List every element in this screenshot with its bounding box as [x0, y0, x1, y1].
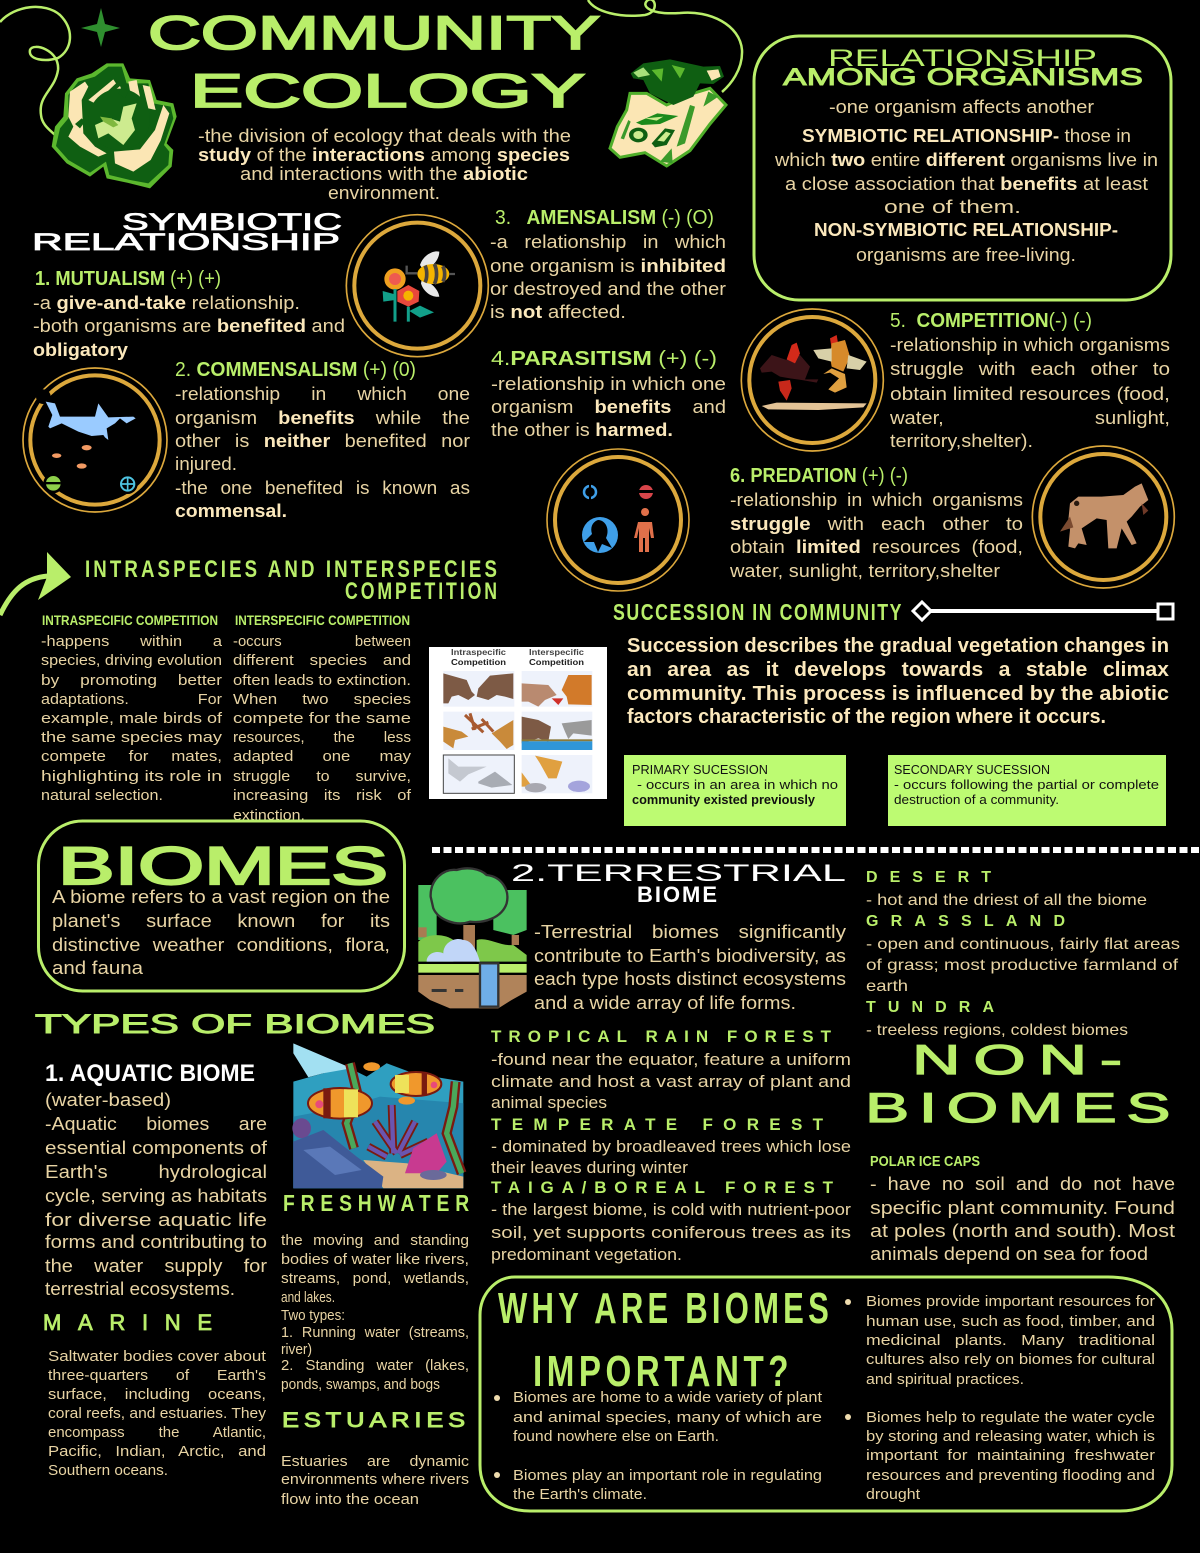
text: amensalism: or destroyed and the other — [490, 279, 726, 299]
text: polar ice caps: POLAR ICE CAPS — [870, 1153, 980, 1170]
text: predation: obtain limited resources (food, — [730, 537, 1023, 557]
text: tropical, temperate, taiga forests: -found near the equator, feature a uniform — [491, 1050, 851, 1069]
text: marine: Pacific, Indian, Arctic, and — [48, 1443, 266, 1460]
text: terrestrial biome description — [534, 922, 846, 1013]
text: estuaries: Estuaries are dynamic — [281, 1453, 470, 1470]
text: tropical, temperate, taiga forests: climate and host a vast array of plant and — [491, 1072, 851, 1091]
text: competition: 5. COMPETITION(-) (-) — [890, 310, 1092, 332]
title — [148, 6, 600, 117]
text: marine — [43, 1310, 267, 1479]
icon: forest landscape with waterfall — [418, 868, 527, 1008]
panel: why are biomes important — [480, 1277, 1172, 1511]
text: commensalism: other is neither benefited nor — [175, 431, 470, 451]
intro text: and interactions with the abiotic — [240, 164, 528, 184]
text: freshwater: river) — [281, 1341, 312, 1358]
text: predation: struggle with each other to — [730, 514, 1023, 534]
text: freshwater: 2. Standing water (lakes, — [281, 1357, 469, 1374]
text: mutualism: -a give-and-take relationship. — [33, 293, 300, 313]
text: aquatic biome: -Aquatic biomes are — [45, 1114, 267, 1134]
text: intraspecific competition: natural selection. — [41, 787, 163, 804]
text: terrestrial biome description: each type hosts distinct ecosystems — [534, 969, 846, 989]
text: commensalism: organism benefits while the — [175, 408, 470, 428]
text: interspecific competition: extinction. — [233, 807, 305, 824]
bullet list: right: Biomes provide important resources for — [866, 1293, 1155, 1310]
text: aquatic biome: (water-based) — [45, 1090, 171, 1110]
text: tropical, temperate, taiga forests: soil, yet supports coniferous trees as its — [491, 1223, 851, 1242]
image: intraspecific vs interspecific competition animals: Competition — [529, 657, 584, 667]
text: estuaries: ESTUARIES — [282, 1409, 470, 1432]
text: desert, grassland, tundra: - treeless regions, coldest biomes — [866, 1022, 1128, 1039]
panel text: a close association that benefits at least — [785, 174, 1148, 194]
text: interspecific competition: struggle to survive, — [233, 768, 411, 785]
arrow — [0, 552, 71, 615]
callout: primary succession: PRIMARY SUCESSION — [632, 762, 768, 777]
text: freshwater: 1. Running water (streams, — [281, 1324, 469, 1341]
bullet list: right: human use, such as food, timber, and — [866, 1313, 1155, 1330]
text: estuaries: environments where rivers — [281, 1471, 469, 1488]
heading: non-biomes: BIOMES — [865, 1084, 1180, 1131]
icon: bee and flowers in gold ring — [346, 215, 488, 357]
text: desert, grassland, tundra — [866, 869, 1180, 1039]
text: terrestrial biome description: contribute to Earth's biodiversity, as — [534, 946, 846, 966]
text: interspecific competition: different species and — [233, 652, 411, 669]
text: mutualism: obligatory — [33, 340, 128, 360]
text: predation: 6. PREDATION (+) (-) — [730, 465, 908, 487]
heading: types of biomes: TYPES OF BIOMES — [35, 1009, 435, 1039]
icon: hands holding globe — [52, 63, 177, 188]
heading: non-biomes: NON- — [912, 1036, 1135, 1083]
icon: shark and remora in gold ring — [23, 368, 167, 512]
text: desert, grassland, tundra: GRASSLAND — [866, 913, 1079, 930]
text: commensalism — [175, 359, 470, 521]
text: aquatic biome: for diverse aquatic life — [45, 1210, 267, 1230]
panel heading — [783, 45, 1143, 91]
text: competition — [889, 310, 1170, 451]
text: desert, grassland, tundra: earth — [866, 978, 908, 995]
text: tropical, temperate, taiga forests: animal species — [491, 1093, 607, 1112]
bullet list: right: resources and preventing flooding and — [866, 1467, 1155, 1484]
text: intraspecific competition: adaptations. For — [41, 691, 222, 708]
text: aquatic biome — [45, 1060, 268, 1299]
callout: primary succession: community existed previously — [632, 792, 816, 807]
icon: reusable bag of greens — [610, 59, 726, 166]
text: parasitism: -relationship in which one — [491, 374, 726, 394]
image: intraspecific vs interspecific competition animals — [429, 647, 607, 799]
bullet list: right: medicinal plants. Many traditional — [866, 1332, 1155, 1349]
panel: biomes definition: distinctive weather conditions, flora, — [52, 935, 390, 955]
panel text: -one organism affects another — [829, 97, 1094, 117]
text: tropical, temperate, taiga forests: predominant vegetation. — [491, 1245, 682, 1264]
bullet list: left: Biomes play an important role in regulating — [513, 1467, 822, 1484]
text: succession description — [627, 635, 1169, 728]
text: freshwater: FRESHWATER — [283, 1190, 475, 1216]
text: freshwater: the moving and standing — [281, 1232, 469, 1249]
text: amensalism: one organism is inhibited — [490, 256, 726, 276]
text: succession description: an area as it develops towards a stable climax — [627, 659, 1169, 681]
heading: terrestrial biome — [511, 860, 846, 907]
text: desert, grassland, tundra: TUNDRA — [866, 999, 1007, 1016]
callout: secondary succession: - occurs following the partial or complete — [894, 777, 1159, 792]
text: tropical, temperate, taiga forests: TROPICAL RAIN FOREST — [491, 1027, 843, 1046]
text: tropical, temperate, taiga forests: TEMPERATE FOREST — [491, 1115, 837, 1134]
text: intraspecific competition: example, male birds of — [41, 710, 223, 727]
bullet list: left — [494, 1389, 823, 1503]
panel heading: WHY ARE BIOMES — [498, 1284, 833, 1333]
text: amensalism: is not affected. — [490, 302, 626, 322]
intro text — [198, 126, 571, 203]
text: interspecific competition: adapted one may — [233, 748, 412, 765]
intro text: study of the interactions among species — [198, 145, 570, 165]
text: predation — [729, 465, 1023, 581]
text: commensalism: commensal. — [175, 501, 287, 521]
panel text: organisms are free-living. — [856, 245, 1076, 265]
text: freshwater: ponds, swamps, and bogs — [281, 1376, 440, 1393]
panel: biomes definition: and fauna — [52, 958, 144, 978]
bullet list: right: drought — [866, 1486, 921, 1503]
text: marine: encompass the Atlantic, — [48, 1424, 266, 1441]
text: commensalism: injured. — [175, 454, 237, 474]
bullet list: left: the Earth's climate. — [513, 1486, 647, 1503]
panel text: NON-SYMBIOTIC RELATIONSHIP- — [814, 220, 1118, 240]
text: estuaries: flow into the ocean — [281, 1491, 419, 1508]
image: intraspecific vs interspecific competition animals: Competition — [451, 657, 506, 667]
text: competition: water, sunlight, — [889, 408, 1170, 428]
icon: fighting roosters in gold ring — [741, 309, 883, 451]
text: intraspecific competition: the same species may — [41, 729, 223, 746]
panel text — [774, 97, 1158, 265]
callout: primary succession — [624, 755, 846, 826]
text: competition: obtain limited resources (food, — [890, 384, 1170, 404]
panel text: SYMBIOTIC RELATIONSHIP- those in — [802, 126, 1131, 146]
text: amensalism: -a relationship in which — [490, 232, 726, 252]
callout: secondary succession — [888, 755, 1166, 826]
text: competition: -relationship in which organisms — [890, 335, 1170, 355]
heading: terrestrial biome: BIOME — [637, 882, 719, 907]
text: intraspecific competition — [41, 612, 223, 804]
icon: sparkle star — [81, 8, 120, 47]
timeline slider decoration — [913, 602, 1173, 620]
callout: primary succession: - occurs in an area in which no — [637, 777, 838, 792]
decorative curl: top right — [588, 0, 742, 92]
bullet list: right: and spiritual practices. — [866, 1371, 1024, 1388]
text: interspecific competition: increasing its risk of — [233, 787, 412, 804]
text: aquatic biome: Earth's hydrological — [45, 1162, 267, 1182]
text: interspecific competition: -occurs between — [233, 633, 411, 650]
heading: intraspecies and interspecies competition — [85, 556, 500, 605]
text: marine: Southern oceans. — [48, 1462, 168, 1479]
decorative curl: top left — [0, 7, 70, 135]
text: tropical, temperate, taiga forests: - dominated by broadleaved trees which lose — [491, 1137, 851, 1156]
text: desert, grassland, tundra: - hot and the driest of all the biome — [866, 892, 1147, 909]
panel heading: RELATIONSHIP — [828, 45, 1097, 72]
text: amensalism — [490, 207, 726, 322]
text: amensalism: 3. AMENSALISM (-) (O) — [495, 207, 714, 229]
text: parasitism: 4.PARASITISM (+) (-) — [491, 348, 717, 370]
text: aquatic biome: essential components of — [45, 1138, 268, 1158]
heading: symbiotic relationship: RELATIONSHIP — [32, 229, 340, 256]
panel: biomes definition: planet's surface known for its — [52, 911, 390, 931]
text: desert, grassland, tundra: DESERT — [866, 869, 1003, 886]
text: intraspecific competition: species, driving evolution — [41, 652, 222, 669]
intro text: environment. — [328, 183, 440, 203]
panel heading — [498, 1284, 833, 1396]
text: intraspecific competition: compete for mates, — [41, 748, 222, 765]
icon: parasite and human in gold ring — [547, 449, 689, 591]
text: tropical, temperate, taiga forests: their leaves during winter — [491, 1158, 688, 1177]
text: desert, grassland, tundra: - open and continuous, fairly flat areas — [866, 936, 1180, 953]
text: estuaries — [281, 1409, 470, 1508]
text: marine: surface, including oceans, — [48, 1386, 266, 1403]
panel heading: AMONG ORGANISMS — [783, 64, 1143, 91]
heading: symbiotic relationship — [32, 209, 342, 256]
bullet list: right: by storing and releasing water, which is — [866, 1428, 1155, 1445]
text: aquatic biome: terrestrial ecosystems. — [45, 1279, 235, 1299]
text: competition: territory,shelter). — [890, 431, 1033, 451]
text: tropical, temperate, taiga forests — [491, 1027, 851, 1264]
text: marine: coral reefs, and estuaries. They — [48, 1405, 267, 1422]
text: intraspecific competition: highlighting its role in — [41, 768, 222, 785]
text: marine: Saltwater bodies cover about — [48, 1348, 267, 1365]
text: aquatic biome: forms and contributing to — [45, 1232, 267, 1252]
text: mutualism: -both organisms are benefited and — [33, 316, 345, 336]
text: interspecific competition: When two species — [233, 691, 411, 708]
text: mutualism: 1. MUTUALISM (+) (+) — [35, 268, 221, 290]
panel: biomes definition: BIOMES — [58, 837, 388, 896]
text: polar ice caps: - have no soil and do not have — [870, 1174, 1175, 1194]
icon: lion in gold ring — [1032, 446, 1174, 588]
panel text: one of them. — [884, 197, 1021, 217]
text: intraspecific competition: -happens within a — [41, 633, 223, 650]
heading: intraspecies and interspecies competition: INTRASPECIES AND INTERSPECIES — [85, 556, 500, 583]
text: freshwater — [281, 1190, 475, 1393]
heading: symbiotic relationship: SYMBIOTIC — [122, 209, 342, 236]
relationship among organisms panel — [754, 36, 1171, 300]
bullet list: right: important for maintaining freshwater — [866, 1447, 1155, 1464]
callout: secondary succession: SECONDARY SUCESSION — [894, 762, 1050, 777]
title: ECOLOGY — [190, 64, 585, 117]
text: parasitism: organism benefits and — [491, 397, 726, 417]
text: polar ice caps — [870, 1153, 1175, 1264]
text: interspecific competition: often leads to extinction. — [233, 672, 411, 689]
panel text: which two entire different organisms live in — [774, 150, 1158, 170]
text: succession description: factors characteristic of the region where it occurs. — [627, 706, 1106, 728]
text: terrestrial biome description: -Terrestrial biomes significantly — [534, 922, 846, 942]
panel: biomes definition: A biome refers to a vast region on the — [52, 887, 390, 907]
text: interspecific competition: resources, the less — [233, 729, 411, 746]
intro text: -the division of ecology that deals with the — [198, 126, 571, 146]
text: freshwater: streams, pond, wetlands, — [281, 1270, 469, 1287]
text: parasitism — [491, 348, 726, 440]
text: competition: struggle with each other to — [890, 359, 1170, 379]
text: succession description: Succession describes the gradual vegetation changes in — [627, 635, 1169, 657]
text: aquatic biome: the water supply for — [45, 1256, 267, 1276]
bullet list: right: Biomes help to regulate the water cycle — [866, 1409, 1155, 1426]
bullet list: right — [845, 1293, 1155, 1503]
text: mutualism — [33, 268, 345, 360]
heading: succession in community: SUCCESSION IN COMMUNITY — [613, 599, 903, 625]
bullet list: right: cultures also rely on biomes for cultural — [866, 1351, 1155, 1368]
bullet list: left: and animal species, many of which are — [513, 1409, 822, 1426]
panel heading: IMPORTANT? — [533, 1347, 793, 1396]
heading: intraspecies and interspecies competition: COMPETITION — [345, 578, 500, 605]
text: predation: -relationship in which organisms — [730, 490, 1023, 510]
illustration: coral reef with clownfish — [292, 1043, 463, 1188]
text: marine: three-quarters of Earth's — [48, 1367, 266, 1384]
text: tropical, temperate, taiga forests: - the largest biome, is cold with nutrient-poor — [491, 1200, 851, 1219]
text: aquatic biome: 1. AQUATIC BIOME — [45, 1060, 255, 1087]
text: freshwater: and lakes. — [281, 1289, 335, 1306]
text: desert, grassland, tundra: of grass; most productive farmland of — [866, 957, 1179, 974]
text: intraspecific competition: by promoting better — [41, 672, 222, 689]
text: polar ice caps: animals depend on sea for food — [870, 1244, 1148, 1264]
text: polar ice caps: specific plant community. Found — [870, 1198, 1175, 1218]
heading: terrestrial biome: 2.TERRESTRIAL — [511, 860, 846, 887]
title: COMMUNITY — [148, 6, 600, 59]
text: commensalism: 2. COMMENSALISM (+) (0) — [175, 359, 416, 381]
text: freshwater: bodies of water like rivers, — [281, 1251, 469, 1268]
text: freshwater: Two types: — [281, 1307, 345, 1324]
competition scenes — [443, 671, 592, 793]
bullet list: left: found nowhere else on Earth. — [513, 1428, 719, 1445]
panel: biomes definition — [38, 821, 404, 991]
text: commensalism: -the one benefited is known as — [175, 478, 470, 498]
image: intraspecific vs interspecific competition animals: Intraspecific — [451, 648, 507, 657]
text: succession description: community. This process is influenced by the abiotic — [627, 683, 1169, 705]
text: aquatic biome: cycle, serving as habitats — [45, 1186, 267, 1206]
text: predation: water, sunlight, territory,shelter — [729, 561, 1000, 581]
text: interspecific competition: compete for the same — [233, 710, 411, 727]
text: terrestrial biome description: and a wide array of life forms. — [534, 993, 796, 1013]
text: interspecific competition — [233, 612, 412, 824]
text: interspecific competition: INTERSPECIFIC COMPETITION — [235, 612, 410, 628]
text: intraspecific competition: INTRASPECIFIC COMPETITION — [42, 612, 218, 628]
heading: non-biomes — [865, 1036, 1180, 1131]
image: intraspecific vs interspecific competition animals: Interspecific — [529, 648, 585, 657]
callout: secondary succession: destruction of a community. — [894, 792, 1059, 807]
text: commensalism: -relationship in which one — [175, 384, 470, 404]
bullet list: left: Biomes are home to a wide variety of plant — [513, 1389, 823, 1406]
text: tropical, temperate, taiga forests: TAIGA/BOREAL FOREST — [491, 1178, 843, 1197]
text: marine: MARINE — [43, 1310, 232, 1335]
text: polar ice caps: at poles (north and south). Most — [870, 1221, 1175, 1241]
text: parasitism: the other is harmed. — [491, 420, 673, 440]
